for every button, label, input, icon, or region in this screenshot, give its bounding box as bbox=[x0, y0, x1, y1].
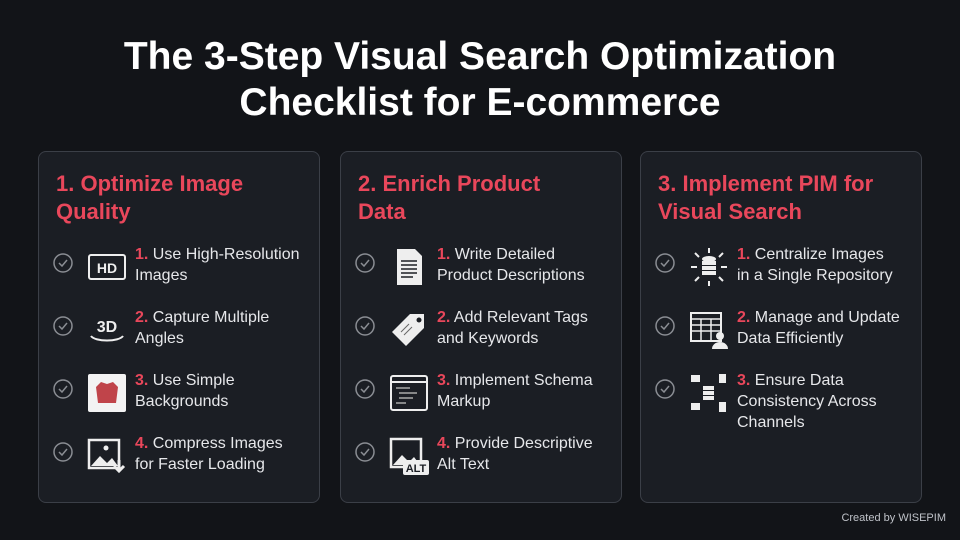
item 4: 4. Provide Descriptive bbox=[437, 435, 593, 452]
item 1: 1. Centralize Images bbox=[737, 246, 884, 263]
heading: Quality bbox=[56, 199, 131, 224]
item 3: 3. Ensure Data bbox=[737, 372, 844, 389]
item 1 bbox=[355, 246, 585, 285]
panel: enrich product data bbox=[340, 151, 622, 503]
item 2: 3D bbox=[97, 319, 117, 336]
item 2: 2. Manage and Update bbox=[737, 309, 900, 326]
item 1: Images bbox=[135, 267, 187, 284]
item 1: Product Descriptions bbox=[437, 267, 585, 284]
item 3: Backgrounds bbox=[135, 393, 228, 410]
heading: 1. Optimize Image bbox=[56, 171, 243, 196]
item 1: in a Single Repository bbox=[737, 267, 893, 284]
item 2 bbox=[53, 309, 269, 347]
title bbox=[124, 35, 836, 124]
item 2: 2. Capture Multiple bbox=[135, 309, 269, 326]
item 3 bbox=[53, 372, 235, 412]
item 4: 4. Compress Images bbox=[135, 435, 283, 452]
heading: Data bbox=[358, 199, 406, 224]
item 4: ALT bbox=[406, 463, 427, 475]
item 3: Consistency Across bbox=[737, 393, 877, 410]
panel: implement PIM bbox=[640, 151, 922, 503]
item 3: 3. Use Simple bbox=[135, 372, 235, 389]
heading bbox=[56, 171, 243, 224]
title: Checklist for E-commerce bbox=[239, 81, 721, 124]
item 3: Markup bbox=[437, 393, 490, 410]
item 1: 1. Write Detailed bbox=[437, 246, 555, 263]
item 3 bbox=[355, 372, 593, 411]
item 1 bbox=[53, 246, 300, 284]
item 4: Alt Text bbox=[437, 456, 489, 473]
heading: Visual Search bbox=[658, 199, 802, 224]
credit: Created by WISEPIM bbox=[841, 512, 946, 524]
panel: implement PIM: Channels bbox=[737, 414, 805, 431]
heading bbox=[358, 171, 540, 224]
item 4 bbox=[53, 435, 283, 473]
item 4: for Faster Loading bbox=[135, 456, 265, 473]
item 2: 2. Add Relevant Tags bbox=[437, 309, 588, 326]
item 2: Angles bbox=[135, 330, 184, 347]
panel: optimize image quality bbox=[38, 151, 320, 503]
heading: 2. Enrich Product bbox=[358, 171, 540, 196]
item 3: 3. Implement Schema bbox=[437, 372, 593, 389]
item 4 bbox=[355, 435, 593, 475]
item 2: Data Efficiently bbox=[737, 330, 843, 347]
item 2 bbox=[655, 309, 900, 349]
item 1: 1. Use High-Resolution bbox=[135, 246, 300, 263]
heading: 3. Implement PIM for bbox=[658, 171, 873, 196]
heading bbox=[658, 171, 873, 224]
item 2: and Keywords bbox=[437, 330, 538, 347]
item 2 bbox=[355, 309, 588, 347]
item 1: HD bbox=[97, 260, 117, 276]
item 1 bbox=[655, 246, 893, 286]
item 3 bbox=[655, 372, 877, 431]
title: The 3-Step Visual Search Optimization bbox=[124, 35, 836, 78]
